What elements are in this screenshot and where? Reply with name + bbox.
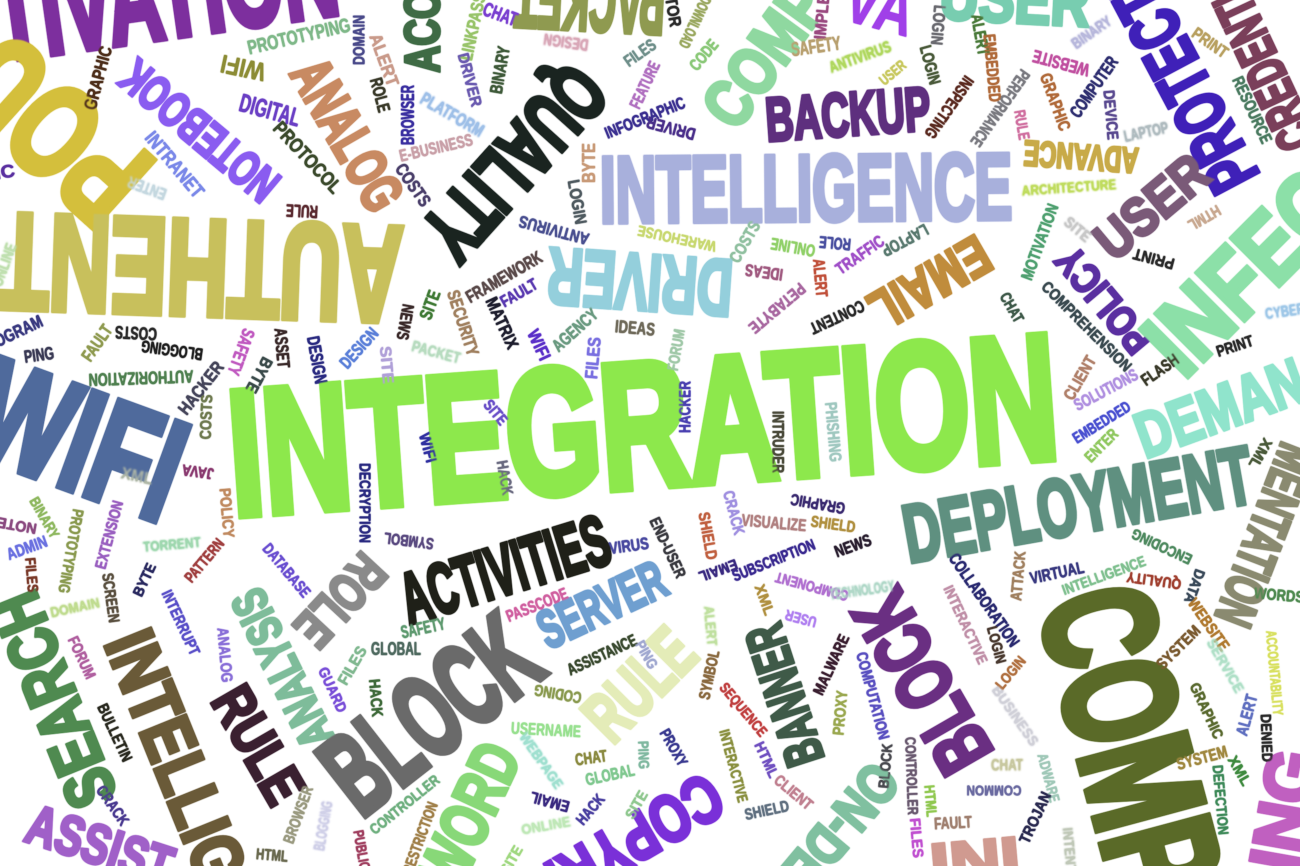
small words: bottom-right cluster: SUBSCRIPTION	[730, 537, 818, 585]
small words: bottom-right cluster: GRAPHIC	[789, 490, 847, 516]
small words: bottom-left cluster: HACK	[493, 459, 515, 497]
small words: bottom-right cluster: CONTROLLER	[901, 737, 921, 815]
small words: top-left cluster: BLOGGING	[140, 336, 204, 364]
small words: top-left cluster: NEWS	[393, 303, 417, 341]
word: EMAIL: EMAIL	[858, 223, 1002, 343]
small words: top-right cluster: HACKER	[676, 381, 694, 433]
small words: bottom-right cluster: USER	[783, 606, 819, 630]
small words: bottom-right cluster: SYSTEM	[1174, 742, 1230, 774]
small words: bottom-left cluster: CHAT	[574, 746, 609, 770]
word: USER mauve: USER	[1083, 142, 1221, 272]
small words: bottom-right cluster: WEBSITE	[1184, 596, 1232, 655]
small words: bottom-right cluster: PROXY	[831, 690, 851, 736]
small words: bottom-right cluster: SERVICE	[1203, 636, 1247, 696]
small words: bottom-right cluster: BLOCK	[876, 743, 896, 789]
small words: bottom-right cluster: INTERACTIVE	[715, 728, 751, 804]
word: ROLE: ROLE	[282, 541, 398, 659]
small words: bottom-right cluster: DEFECTION	[1208, 764, 1232, 836]
small words: top-right cluster: IDEAS	[744, 260, 784, 284]
word: ADVANCE: ADVANCE	[1022, 133, 1140, 181]
small words: bottom-right cluster: LOGIN	[983, 624, 1009, 666]
small words: bottom-right cluster: FAULT	[934, 812, 973, 833]
small words: top-left cluster: E-BUSINESS	[397, 130, 475, 166]
small words: top-right cluster: WAREHOUSE	[636, 221, 718, 255]
small words: top-left cluster: AUTHORIZATION	[88, 366, 194, 390]
small words: top-left cluster: RULE	[285, 200, 319, 222]
small words: bottom-right cluster: COMPUTATION	[852, 650, 892, 742]
word: BACKUP: BACKUP	[763, 75, 933, 155]
small words: bottom-left cluster: ANALOG	[213, 627, 235, 683]
small words: top-left cluster: FILES	[581, 336, 605, 380]
small words: bottom-right cluster: VIRTUAL	[1028, 558, 1086, 588]
small words: bottom-left cluster: HACK	[573, 791, 609, 829]
small words: top-left cluster: PACKET	[410, 338, 463, 368]
small words: top-left cluster: MATRIX	[481, 294, 523, 352]
word: INTELLIGENCE: INTELLIGENCE	[600, 134, 1012, 242]
small words: top-left cluster: PLATFORM	[417, 89, 487, 141]
small words: top-left cluster: AGENCY	[548, 304, 602, 356]
small words: bottom-right cluster: ENCODING	[1129, 525, 1195, 567]
small words: bottom-left cluster: WIFI	[415, 431, 439, 465]
small words: bottom-left cluster: FILES	[335, 643, 371, 688]
small words: bottom-left cluster: BLOGGING	[311, 800, 337, 852]
small words: bottom-right cluster: SHIELD	[694, 511, 720, 561]
small words: top-left cluster: ALERT	[365, 31, 403, 89]
small words: bottom-left cluster: JAVA	[181, 460, 215, 482]
small words: top-right cluster: PRINT	[1131, 244, 1176, 272]
small words: top-left cluster: FAULT	[77, 321, 117, 365]
small words: bottom-right cluster: ALERT	[700, 605, 720, 647]
small words: bottom-right cluster: DATA	[1180, 567, 1208, 605]
small words: top-right cluster: PRINT	[1188, 24, 1232, 63]
small words: top-left cluster: FAULT	[497, 275, 541, 311]
small words: bottom-left cluster: PASSCODE	[503, 584, 571, 626]
small words: bottom-left cluster: ADMIN	[4, 532, 50, 564]
small words: bottom-left cluster: DOMAIN	[49, 594, 101, 622]
small words: bottom-right cluster: XML	[751, 582, 777, 618]
small words: top-left cluster: DESIGN	[542, 29, 590, 55]
small words: bottom-right cluster: TECHNOLOGY	[829, 578, 896, 604]
small words: bottom-left cluster: PATTERN	[182, 536, 228, 586]
small words: top-left cluster: DESIGN	[336, 323, 382, 373]
small words: top-right cluster: HTML	[1184, 201, 1223, 233]
small words: bottom-left cluster: FILES	[21, 557, 41, 593]
small words: bottom-right cluster: SHIELD	[743, 798, 791, 824]
small words: bottom-right cluster: GRAPHIC	[1186, 680, 1226, 742]
small words: bottom-right cluster: MALWARE	[811, 632, 854, 698]
small words: bottom-left cluster: EMAIL	[528, 788, 572, 814]
small words: bottom-right cluster: CRACK	[719, 489, 747, 537]
small words: top-right cluster: LAPTOP	[1122, 118, 1170, 146]
small words: top-left cluster: SECURITY	[443, 288, 483, 358]
small words: bottom-right cluster: ADWARE	[1033, 752, 1063, 804]
small words: top-right cluster	[636, 0, 1300, 473]
small words: bottom-right cluster	[646, 435, 1300, 866]
word: QUALITY: QUALITY	[404, 47, 624, 277]
small words: bottom-left cluster: INTERRUPT	[158, 588, 203, 658]
small words: top-left cluster	[0, 0, 688, 440]
small words: top-left cluster: ROLE	[366, 76, 394, 114]
small words: top-right cluster: MOTIVATION	[1017, 201, 1063, 283]
small words: top-right cluster: ROLE	[818, 232, 852, 254]
small words: top-right cluster: LOGIN	[927, 4, 949, 46]
small words: bottom-right cluster: COLLABORATION	[945, 549, 1023, 651]
small words: top-right cluster: LOGIN	[916, 43, 944, 87]
small words: bottom-right cluster: NEWS	[832, 531, 874, 561]
small words: bottom-right cluster: PROXY	[656, 726, 690, 770]
small words: top-left cluster: DRIVER	[454, 51, 484, 109]
small words: top-right cluster: BINARY	[1069, 13, 1116, 53]
small words: top-left cluster: BROWSER	[398, 85, 418, 145]
word: ANALYSIS: ANALYSIS	[221, 580, 345, 756]
small words: top-right cluster: COMPUTER	[1066, 53, 1122, 121]
small words: bottom-left cluster: HACK	[365, 678, 385, 718]
small words: bottom-right cluster: CHAT	[991, 756, 1023, 774]
small words: bottom-right cluster: TROJAN	[1017, 789, 1055, 847]
small words: bottom-right cluster: QUALITY	[1126, 568, 1182, 592]
small words: bottom-right cluster: SYMBOL	[696, 649, 724, 701]
small words: bottom-right cluster: COMMON	[966, 782, 1022, 798]
small words: top-right cluster: EMBEDDED	[1070, 399, 1134, 447]
small words: bottom-left cluster: POLICY	[215, 487, 237, 539]
word: ACTIVITIES: ACTIVITIES	[391, 500, 619, 640]
small words: top-left cluster: LOGIN	[564, 178, 590, 226]
small words: bottom-left cluster: CRACK	[92, 783, 132, 830]
small words: top-right cluster: CLIENT	[1060, 352, 1100, 404]
small words: top-left cluster: PING	[23, 343, 55, 367]
small words: bottom-right cluster: FILES	[906, 817, 926, 859]
small words: top-left cluster: HACKER	[174, 357, 228, 419]
small words: bottom-left cluster: TORRENT	[142, 534, 202, 556]
small words: bottom-left cluster: EXTENSION	[93, 499, 127, 571]
small words: top-right cluster: LAPTOP	[878, 220, 932, 260]
small words: top-right cluster: COMPREHENSION	[1038, 279, 1134, 375]
small words: top-right cluster: PHISHING	[821, 401, 845, 463]
small words: top-left cluster: ASSET	[270, 327, 294, 369]
small words: top-left cluster: BINARY	[486, 45, 514, 95]
small words: bottom-left cluster: BROWSER	[281, 784, 317, 846]
small words: top-right cluster: CONTENT	[806, 296, 867, 338]
small words: top-right cluster: RESOURCE	[1228, 73, 1276, 147]
small words: bottom-left cluster: FORUM	[64, 634, 98, 682]
small words: top-left cluster: FEATURE	[626, 58, 664, 112]
small words: top-right cluster: CHAT	[996, 290, 1026, 326]
word: RULE dark: RULE	[199, 675, 317, 815]
small words: top-right cluster: TRAFFIC	[832, 231, 888, 279]
small words: bottom-left cluster: ASSISTANCE	[564, 631, 640, 679]
word: BLOCK gray: BLOCK	[296, 589, 564, 839]
small words: top-right cluster: PERFORMANCE	[966, 66, 1034, 150]
small words: bottom-left cluster: ONLINE	[520, 813, 572, 839]
small words: bottom-right cluster: XML	[1224, 753, 1254, 789]
small words: bottom-right cluster: BUSINESS	[988, 682, 1042, 750]
small words: bottom-right cluster: ALERT	[1232, 692, 1262, 738]
small words: top-right cluster: ARCHITECTURE	[1021, 176, 1117, 200]
small words: bottom-right cluster: END-USER	[646, 515, 689, 581]
small words: bottom-left cluster: PING	[634, 741, 652, 769]
small words: bottom-right cluster: CLIENT	[770, 772, 816, 814]
small words: bottom-left cluster: GUARD	[314, 665, 350, 715]
small words: top-right cluster: SOLUTIONS	[1071, 365, 1141, 415]
small words: top-left cluster: BYTE	[579, 143, 599, 183]
small words: top-left cluster: SAFETY	[223, 326, 259, 378]
word: POLICY: POLICY	[1046, 237, 1162, 363]
small words: bottom-left cluster: CODING	[533, 680, 583, 706]
small words: bottom-right cluster: ACCOUNTABILITY	[1262, 630, 1286, 716]
small words: bottom-left cluster: GLOBAL	[584, 761, 636, 789]
small words: bottom-right cluster: HTML	[750, 739, 782, 781]
small words: bottom-right cluster: XML	[1245, 435, 1275, 471]
small words: top-right cluster: PETABYTE	[745, 279, 809, 337]
small words: bottom-left cluster: VIRUS	[608, 534, 650, 558]
small words: top-right cluster: SITE	[1060, 214, 1094, 246]
small words: top-left cluster: FILES	[620, 35, 660, 71]
small words: top-left cluster: INTRANET	[140, 127, 208, 203]
word: BLOCK purple: BLOCK	[835, 575, 1009, 789]
word: DRIVER: DRIVER	[545, 231, 735, 333]
small words: bottom-left cluster: WEBPAGE	[515, 730, 567, 792]
small words: top-right cluster: ONLINE	[769, 234, 817, 260]
small words: top-right cluster: FORUM	[665, 328, 689, 372]
small words: top-left cluster: FRAMEWORK	[462, 247, 546, 307]
small words: bottom-right cluster: DENIED	[1257, 714, 1275, 762]
small words: bottom-left cluster: GLOBAL	[371, 639, 421, 659]
small words: top-left cluster: BYTE	[242, 354, 276, 396]
small words: top-right cluster: GRAPHIC	[1036, 71, 1074, 133]
small words: top-left cluster: SITE	[415, 287, 445, 323]
small words: bottom-right cluster: SYSTEM	[1154, 623, 1204, 673]
small words: top-right cluster: DRIVER	[644, 112, 698, 144]
small words: bottom-left cluster: DATABASE	[259, 541, 314, 602]
small words: top-right cluster: EMBEDDED	[980, 33, 1004, 103]
word: SERVER: SERVER	[528, 549, 676, 661]
small words: top-left cluster: PROTOTYPING	[245, 14, 353, 60]
small words: top-right cluster: RULE	[1010, 109, 1032, 141]
small words: bottom-right cluster: COMPONENT	[774, 568, 850, 604]
small words: top-left cluster: COSTS	[198, 394, 216, 440]
word: ANALOG: ANALOG	[278, 47, 416, 223]
small words: bottom-left cluster: BINARY	[25, 494, 63, 542]
small words: bottom-left cluster: CONTROLLER	[367, 772, 443, 838]
small words: bottom-left cluster: BYTE	[130, 561, 160, 599]
small words: bottom-left cluster	[0, 431, 661, 866]
small words: bottom-right cluster: SHIELD	[810, 513, 856, 537]
small words: bottom-left cluster: SYMBOL	[383, 528, 435, 551]
small words: bottom-left cluster: SITE	[622, 788, 652, 822]
small words: top-right cluster: WEBSITE	[1030, 46, 1092, 80]
small words: top-right cluster: PRINT	[1214, 333, 1256, 361]
small words: top-right cluster: SAFETY	[790, 33, 843, 61]
small words: top-left cluster: SITE	[479, 397, 511, 429]
word: RULE pale: RULE	[568, 613, 712, 757]
small words: top-right cluster: CODE	[685, 35, 723, 75]
small words: bottom-left cluster: SCREEN	[98, 572, 122, 624]
small words: bottom-right cluster: EMAIL	[696, 555, 740, 585]
small words: top-left cluster: PROTOCOL	[268, 118, 346, 198]
small words: bottom-left cluster: PROTOTYPING	[54, 508, 86, 594]
small words: bottom-right cluster: VISUALIZE	[741, 511, 807, 535]
small words: top-left cluster: WIFI	[523, 326, 555, 364]
small words: top-right cluster: INSPECTING	[921, 72, 977, 142]
small words: top-right cluster: ANTIVIRUS	[826, 37, 894, 77]
small words: bottom-left cluster: PING	[631, 638, 661, 672]
small words: top-left cluster: GRAPHIC	[80, 44, 116, 112]
small words: bottom-left cluster: SAFETY	[399, 614, 447, 642]
small words: top-left cluster: DIGITAL	[236, 87, 304, 133]
small words: top-left cluster: ENTER	[125, 172, 169, 204]
small words: bottom-left cluster: DECRYPTION	[356, 463, 372, 543]
small words: bottom-left cluster: BULLETIN	[93, 701, 135, 765]
small words: bottom-right cluster: LOGIN	[992, 653, 1030, 693]
small words: top-left cluster: DESIGN	[303, 335, 331, 385]
small words: top-right cluster: ALERT	[967, 13, 993, 58]
small words: top-right cluster: USER	[876, 57, 910, 89]
small words: top-left cluster: ANTIVIRUS	[517, 212, 591, 248]
small words: top-right cluster: COSTS	[726, 218, 764, 266]
small words: bottom-right cluster: INTELLIGENCE	[1060, 553, 1148, 599]
small words: top-right cluster: ENTER	[1082, 426, 1122, 466]
small words: top-right cluster: DEVICE	[1099, 89, 1121, 141]
small words: bottom-left cluster: XML	[119, 463, 155, 489]
small words: top-left cluster: COSTS	[115, 322, 157, 344]
word: BANNER: BANNER	[734, 617, 836, 773]
small words: top-left cluster: IDEAS	[614, 316, 656, 340]
small words: top-right cluster: FLASH	[1137, 350, 1183, 390]
small words: top-right cluster: ALERT	[809, 258, 831, 298]
small words: bottom-left cluster: USERNAME	[511, 719, 581, 741]
small words: top-left cluster: COSTS	[391, 160, 435, 210]
small words: top-left cluster: SITE	[376, 345, 396, 385]
small words: top-left cluster: INFOGRAPHIC	[602, 93, 688, 143]
small words: top-left cluster: WIFI	[218, 49, 268, 87]
small words: bottom-right cluster: SEQUENCE	[716, 680, 770, 740]
small words: bottom-right cluster: HTML	[920, 784, 940, 818]
small words: top-right cluster: INTRUDER	[768, 411, 788, 473]
small words: bottom-right cluster: ATTACK	[1008, 550, 1030, 602]
small words: bottom-right cluster: INTERACTIVE	[939, 583, 991, 667]
